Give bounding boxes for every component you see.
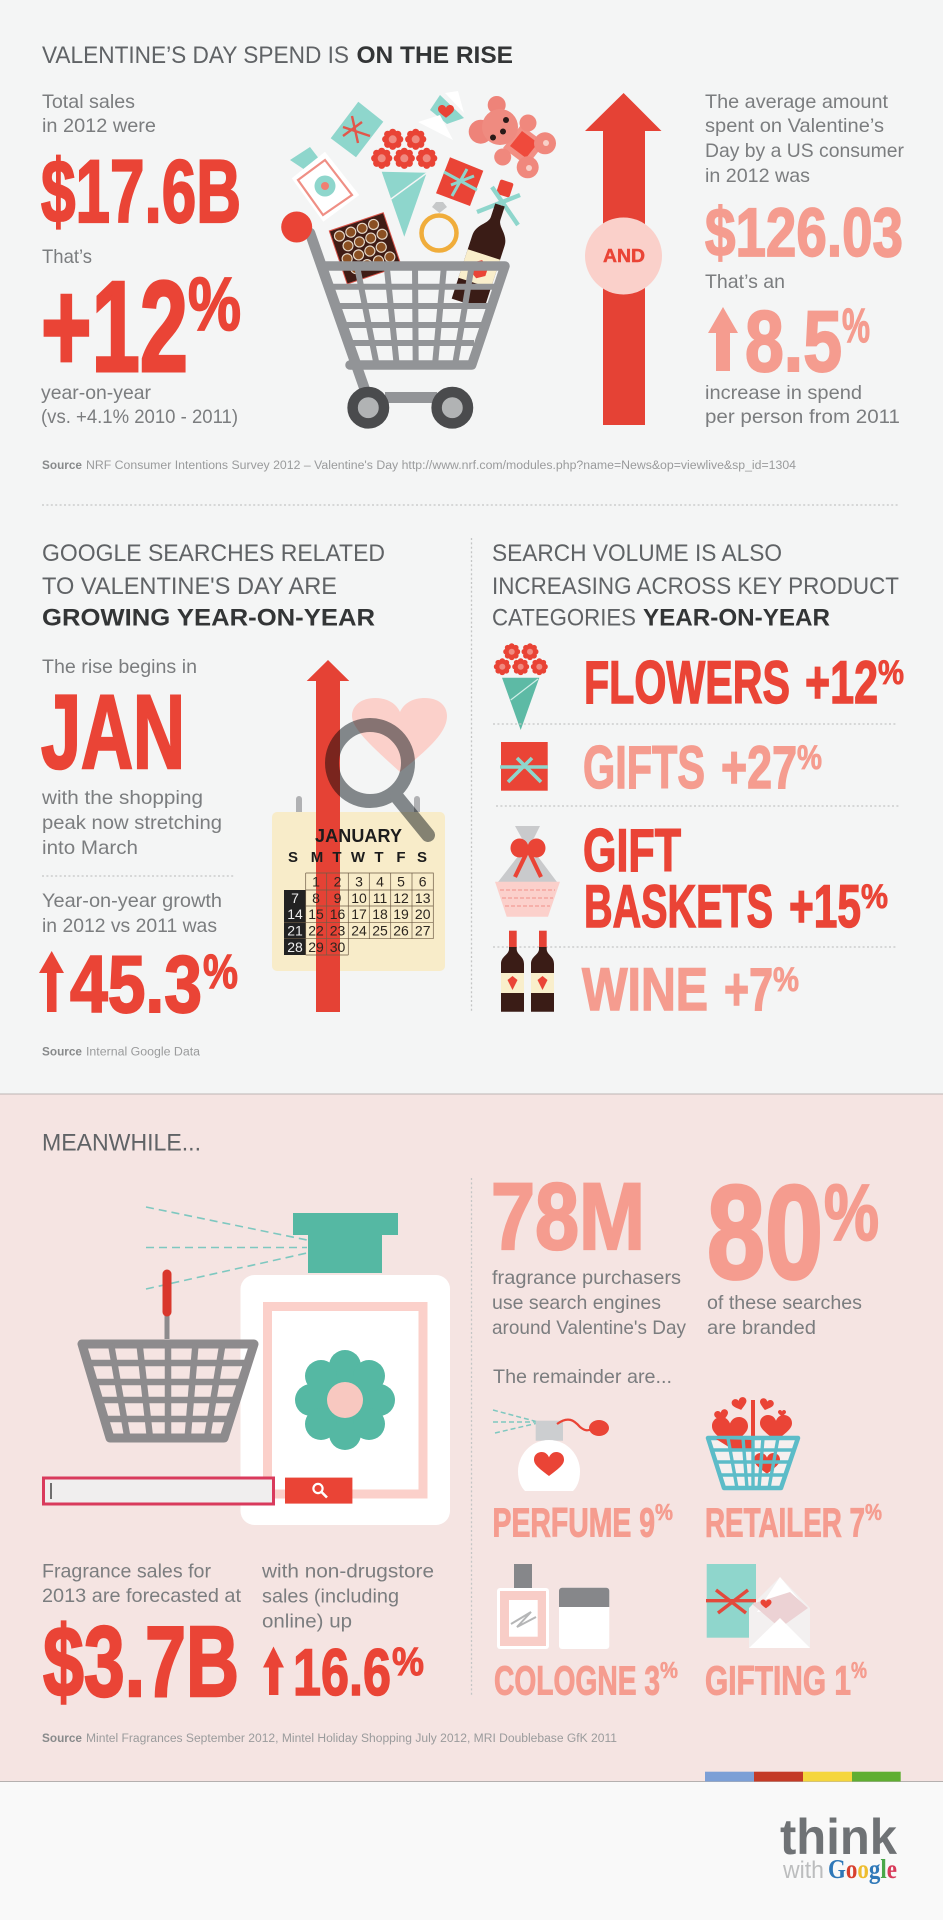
heading: google searches: GOOGLE SEARCHES RELATED [42, 540, 385, 567]
stat: up 16.6%: 16.6 [293, 1635, 391, 1709]
calendar dates: 29 [308, 939, 324, 955]
row: gifts [500, 734, 822, 801]
stat: up 45.3%: 45.3 [70, 940, 202, 1030]
arrow: big red rise with AND [585, 93, 662, 425]
item: retailer: RETAILER 7 [705, 1500, 865, 1546]
row: gift baskets: % [861, 878, 888, 916]
illustration: shopping cart with gifts [281, 91, 556, 423]
source: google data: Internal Google Data [86, 1046, 201, 1058]
text block: year-on-year growth: Year-on-year growth [42, 890, 222, 912]
cart knob [281, 212, 312, 242]
calendar dates: 26 [393, 922, 409, 938]
google colour bar [705, 1772, 901, 1782]
calendar dates: 5 [397, 874, 405, 890]
text: that's: That’s [42, 246, 92, 268]
background: pink section [0, 1094, 943, 1781]
text block: non-drugstore: sales (including [262, 1586, 399, 1608]
text block: increase in spend [705, 382, 900, 428]
calendar dates: 12 [393, 890, 409, 906]
text block: shopping peak: peak now stretching [42, 812, 222, 834]
calendar dates: 8 [312, 890, 320, 906]
icon: heart [352, 698, 447, 772]
calendar weekdays: F [396, 849, 406, 866]
text block: increase in spend: increase in spend [705, 382, 862, 404]
item: gifting [705, 1564, 867, 1704]
calendar weekdays: T [374, 849, 384, 866]
source: NRF: Source [42, 460, 82, 472]
background: footer [0, 1781, 943, 1920]
bottle body [240, 1275, 450, 1525]
spray lines [146, 1207, 307, 1289]
calendar dates: 13 [415, 890, 431, 906]
calendar weekdays: W [351, 849, 366, 866]
stat: up 16.6%: % [392, 1640, 424, 1684]
item: retailer: % [865, 1499, 882, 1525]
heading: search volume: INCREASING ACROSS KEY PRODUCT [492, 573, 899, 600]
row: gift baskets: BASKETS [584, 873, 773, 940]
text block: shopping peak: with the shopping [41, 787, 203, 809]
source: mintel: Mintel Fragrances September 2012, Mintel Holiday Shopping July 2012, MRI Doublebase GfK 2011 [86, 1733, 617, 1745]
calendar pegs [296, 796, 420, 816]
row: gift baskets: GIFT [583, 817, 681, 884]
text block: fragrance sales [42, 1560, 242, 1607]
calendar dates: 19 [393, 906, 409, 922]
icon: bouquet [371, 129, 437, 237]
text block: year-on-year: (vs. +4.1% 2010 - 2011) [41, 406, 238, 428]
row: gifts: % [797, 739, 822, 777]
calendar dates: 21 [287, 922, 303, 938]
text block: total sales [42, 91, 156, 137]
item: retailer [705, 1396, 882, 1546]
text block: non-drugstore: with non-drugstore [261, 1560, 434, 1582]
icon: red gift [436, 157, 483, 206]
calendar dates: 11 [373, 890, 387, 906]
calendar dates: 20 [415, 906, 431, 922]
item: gifting: GIFTING 1 [705, 1658, 851, 1704]
calendar dates: 28 [287, 939, 303, 955]
icon: chocolate box [329, 213, 401, 284]
text block: fragrance sales: 2013 are forecasted at [42, 1585, 242, 1607]
arrow: big red rise with AND: AND [603, 246, 645, 266]
icon: gift [500, 742, 548, 791]
icon: teddy bear [469, 96, 556, 178]
icon: perfume atomizer [493, 1410, 609, 1491]
logo: think with google: with [782, 1857, 824, 1884]
text: that's an: That’s an [705, 271, 785, 293]
heading: google searches [42, 540, 385, 632]
icon: teal gift [331, 102, 383, 157]
text: the rise begins in: The rise begins in [42, 656, 197, 678]
bottle label [268, 1306, 423, 1494]
text block: year-on-year growth [42, 890, 222, 937]
calendar dates: 15 [308, 906, 324, 922]
text block: non-drugstore: online) up [262, 1611, 352, 1633]
title: on the rise: ON THE RISE [356, 42, 513, 69]
stat: +12%: +12 [41, 255, 188, 399]
text: the remainder: The remainder are... [493, 1366, 672, 1388]
text block: average amount: The average amount [705, 91, 889, 113]
row: gifts: GIFTS [583, 734, 705, 801]
row: gifts: +27 [721, 734, 797, 801]
heading: search volume [492, 540, 899, 632]
source: google data: Source [42, 1046, 82, 1058]
stat: 80%: 80 [707, 1159, 823, 1307]
illustration: shopping basket [82, 1274, 254, 1438]
logo: think with google: think [780, 1809, 897, 1865]
row: wine: +7 [724, 956, 773, 1023]
calendar dates: 9 [334, 890, 342, 906]
item: cologne [494, 1564, 678, 1704]
text block: branded: of these searches [707, 1292, 862, 1314]
text block: fragrance purchasers: around Valentine's Day [492, 1317, 686, 1339]
row: wine: % [773, 961, 799, 999]
calendar dates: 17 [351, 906, 367, 922]
calendar dates [287, 874, 431, 955]
text block: fragrance sales: Fragrance sales for [42, 1560, 211, 1582]
item: perfume [492, 1410, 673, 1546]
calendar dates: 16 [330, 906, 345, 922]
title: on the rise [42, 42, 513, 69]
item: cologne: COLOGNE 3 [494, 1658, 660, 1704]
heading: google searches: GROWING YEAR-ON-YEAR [42, 604, 375, 632]
icon: bottle with ribbon [452, 179, 520, 309]
row: flowers: FLOWERS [584, 649, 790, 716]
row: wine: WINE [582, 956, 708, 1023]
text block: average amount [705, 91, 904, 187]
text block: increase in spend: per person from 2011 [705, 406, 900, 428]
calendar dates: 18 [372, 906, 388, 922]
arrow [307, 660, 349, 1012]
source: google data [42, 1046, 201, 1058]
row: wine [501, 931, 799, 1023]
heading: google searches: TO VALENTINE'S DAY ARE [42, 573, 337, 600]
row: gift baskets [495, 817, 888, 940]
heading: search volume: YEAR-ON-YEAR [643, 604, 830, 632]
stat: $3.7B: $3.7B [43, 1606, 239, 1718]
bottle cap [293, 1213, 398, 1273]
stat: 80%: % [824, 1168, 879, 1257]
text block: average amount: Day by a US consumer [705, 140, 904, 162]
calendar weekdays: M [311, 849, 323, 866]
row: flowers [494, 643, 904, 730]
calendar dates: 6 [419, 874, 427, 890]
text block: branded: are branded [707, 1317, 816, 1339]
item: perfume: % [655, 1499, 673, 1525]
text block: year-on-year growth: in 2012 vs 2011 was [42, 915, 217, 937]
source: NRF: NRF Consumer Intentions Survey 2012 – Valentine's Day http://www.nrf.com/modules.php?name=News&op=viewlive&sp_id=1304 [86, 460, 797, 472]
icon: wine bottles [501, 931, 554, 1012]
text block: fragrance purchasers: fragrance purchasers [492, 1267, 681, 1289]
search button [285, 1478, 352, 1504]
icon: cologne bottle and jar [497, 1564, 609, 1649]
cart frame [310, 233, 505, 403]
calendar dates: 25 [372, 922, 388, 938]
icon: card and envelope [418, 91, 464, 140]
logo: think with google: Google [828, 1854, 897, 1884]
icon: flowers [494, 643, 548, 730]
calendar weekdays: T [332, 849, 342, 866]
text block: total sales: Total sales [42, 91, 135, 113]
heading: search volume: SEARCH VOLUME IS ALSO [492, 540, 782, 567]
row: flowers: +12 [805, 649, 878, 716]
calendar dates: 30 [330, 939, 345, 955]
item: gifting: % [851, 1657, 867, 1683]
calendar dates: 27 [415, 922, 431, 938]
calendar dates: 4 [376, 874, 384, 890]
heading: meanwhile: MEANWHILE... [42, 1130, 201, 1157]
flower [295, 1350, 395, 1450]
text block: fragrance purchasers: use search engines [492, 1292, 661, 1314]
calendar dates: 2 [334, 874, 342, 890]
calendar weekdays [288, 849, 427, 866]
icon: small perfume [290, 147, 359, 222]
calendar dates: 3 [355, 874, 363, 890]
icon: gift and envelope [706, 1564, 810, 1648]
stat: up 8.5%: % [842, 300, 870, 353]
text block: average amount: in 2012 was [705, 165, 810, 187]
calendar weekdays: S [417, 849, 427, 866]
title: on the rise: VALENTINE’S DAY SPEND IS [42, 42, 349, 69]
calendar weekdays: S [288, 849, 298, 866]
stat: 78M: 78M [491, 1164, 645, 1270]
text block: fragrance purchasers [492, 1267, 686, 1339]
stat: $17.6B: $17.6B [41, 141, 241, 241]
text block: average amount: spent on Valentine’s [705, 115, 884, 137]
stat: up 8.5%: 8.5 [745, 294, 842, 390]
calendar dates: 7 [291, 890, 299, 906]
icon: basket of hearts [708, 1396, 798, 1488]
stat: +12%: % [188, 262, 241, 346]
calendar black column [284, 890, 306, 955]
text block: year-on-year: year-on-year [41, 382, 152, 404]
calendar dates: 24 [351, 922, 367, 938]
text block: non-drugstore [261, 1560, 434, 1633]
cart wheels [353, 392, 468, 423]
background: top section [0, 0, 943, 1094]
item: perfume: PERFUME 9 [492, 1500, 655, 1546]
illustration: calendar, arrow, heart and magnifier [272, 660, 447, 1012]
row: gift baskets: +15 [789, 873, 861, 940]
search box [44, 1478, 274, 1504]
stat: up 45.3%: % [203, 946, 238, 999]
text block: year-on-year [41, 382, 238, 428]
icon: gift basket [495, 826, 560, 917]
calendar dates: 10 [351, 890, 367, 906]
text block: shopping peak [41, 787, 222, 859]
row: flowers: % [878, 654, 904, 692]
calendar dates: 23 [330, 922, 345, 938]
text block: total sales: in 2012 were [42, 115, 156, 137]
calendar dates: 14 [287, 906, 303, 922]
calendar month: JANUARY [315, 826, 402, 846]
heading: search volume: CATEGORIES [492, 604, 636, 632]
icon: magnifier [332, 725, 428, 835]
calendar dates: 1 [312, 874, 320, 890]
calendar page [272, 812, 445, 971]
stat: JAN: JAN [41, 674, 185, 791]
source: mintel: Source [42, 1733, 82, 1745]
text block: shopping peak: into March [42, 837, 138, 859]
item: cologne: % [660, 1657, 678, 1683]
illustration: perfume bottle with spray [146, 1207, 450, 1525]
text block: branded [707, 1292, 862, 1339]
icon: ring [422, 202, 456, 250]
calendar dates: 22 [308, 922, 324, 938]
